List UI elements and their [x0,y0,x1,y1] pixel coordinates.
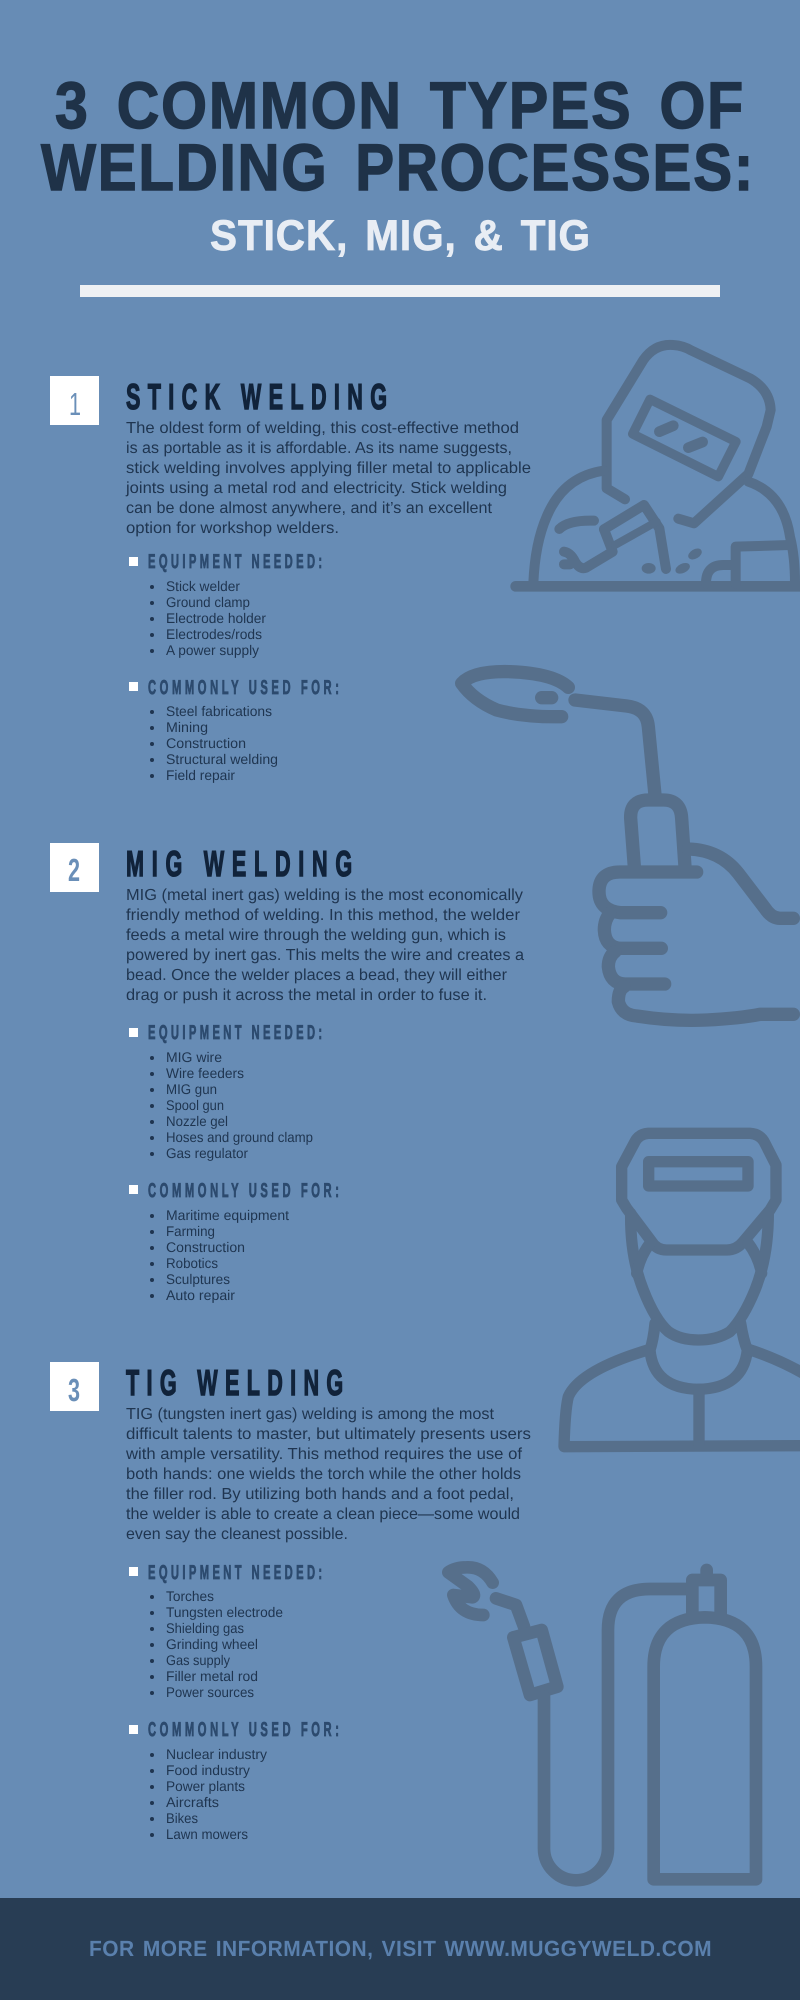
description: stick welding [125,420,531,537]
list: tig uses: Lawn mowers [166,1826,248,1842]
panel: mig welding [50,843,524,1303]
description: tig welding [125,1406,531,1543]
list: mig equipment: Wire feeders [166,1065,244,1081]
description: tig welding: with ample versatility. This method requires the use of [125,1446,523,1463]
description: stick welding: is as portable as it is affordable. As its name suggests, [126,440,512,457]
description: mig welding: friendly method of welding. In this method, the welder [126,907,521,924]
list: tig equipment: Filler metal rod [166,1668,258,1684]
description: mig welding: drag or push it across the metal in order to fuse it. [126,987,487,1004]
list: tig equipment: Power sources [166,1684,254,1700]
description: tig welding: both hands: one wields the torch while the other holds [126,1466,521,1483]
heading: stick welding: STICK WELDING [126,376,387,417]
list: stick equipment: Stick welder [166,578,240,594]
list: mig equipment: MIG wire [166,1049,222,1065]
heading: tig welding: TIG WELDING [126,1362,343,1403]
description: tig welding: even say the cleanest possible. [126,1526,348,1543]
title [41,68,755,204]
list: stick equipment: Electrode holder [166,610,266,626]
number badge 2 [50,843,99,892]
list: mig equipment: Nozzle gel [166,1113,228,1129]
description: tig welding: the filler rod. By utilizing both hands and a foot pedal, [126,1486,514,1503]
divider bar [80,285,720,297]
footer band [0,1898,800,2000]
list: mig uses [150,1207,289,1303]
list: stick uses: Construction [166,735,246,751]
number badge 1 [50,376,99,425]
list: tig equipment: Grinding wheel [166,1636,258,1652]
list: stick equipment: A power supply [166,642,259,658]
number badge 2: 2 [68,852,80,888]
description: mig welding: powered by inert gas. This melts the wire and creates a [126,947,524,964]
list: tig equipment: Tungsten electrode [166,1604,283,1620]
description: mig welding: feeds a metal wire through the welding gun, which is [126,927,506,944]
list: mig uses: Farming [166,1223,215,1239]
list: mig uses: Construction [166,1239,245,1255]
list: tig uses: Power plants [166,1778,245,1794]
list: tig uses [150,1746,267,1842]
list: stick uses [150,703,278,783]
description: mig welding [126,887,524,1004]
description: mig welding: MIG (metal inert gas) welding is the most economically [126,887,523,904]
number badge 3: 3 [68,1372,80,1408]
list: tig equipment: Torches [166,1588,214,1604]
subheading: commonly used for: COMMONLY USED FOR: [148,1719,339,1741]
description: mig welding: bead. Once the welder places a bead, they will either [126,967,508,984]
list: stick uses: Steel fabrications [166,703,272,719]
list: stick uses: Structural welding [166,751,278,767]
list: mig uses: Sculptures [166,1271,230,1287]
panel: stick welding [50,376,531,783]
list: mig equipment: Spool gun [166,1097,224,1113]
number badge 3 [50,1362,99,1411]
list: mig uses: Auto repair [166,1287,235,1303]
footer text: FOR MORE INFORMATION, VISIT WWW.MUGGYWELD.COM [89,1936,712,1961]
list: tig uses: Food industry [166,1762,250,1778]
description: stick welding: The oldest form of welding, this cost-effective method [126,420,519,437]
description: stick welding: option for workshop welders. [126,520,339,537]
icon: hand holding welding torch [462,672,793,1020]
list: stick equipment: Electrodes/rods [166,626,262,642]
list: stick equipment: Ground clamp [166,594,250,610]
subheading: equipment needed: EQUIPMENT NEEDED: [148,1022,322,1044]
description: tig welding: difficult talents to master, but ultimately presents users [126,1426,531,1443]
list: stick equipment [150,578,266,658]
description: stick welding: joints using a metal rod and electricity. Stick welding [125,480,507,497]
subtitle: STICK, MIG, & TIG [210,212,591,260]
subheading: equipment needed: EQUIPMENT NEEDED: [148,1562,322,1584]
number badge 1: 1 [69,386,81,422]
description: stick welding: stick welding involves applying filler metal to applicable [126,460,531,477]
subheading: commonly used for: COMMONLY USED FOR: [148,1180,339,1202]
subheading: equipment needed: EQUIPMENT NEEDED: [148,551,322,573]
list: mig uses: Robotics [166,1255,218,1271]
list: tig equipment: Gas supply [166,1652,230,1668]
icon: welder at work [516,345,800,586]
list: tig equipment: Shielding gas [166,1620,244,1636]
list: tig uses: Nuclear industry [166,1746,267,1762]
list: tig uses: Aircrafts [166,1794,219,1810]
icon: welder portrait with mask [564,1133,800,1447]
list: mig equipment: Hoses and ground clamp [166,1129,313,1145]
subheading: commonly used for: COMMONLY USED FOR: [148,677,339,699]
list: mig equipment: MIG gun [166,1081,217,1097]
list: mig equipment: Gas regulator [166,1145,248,1161]
list: mig uses: Maritime equipment [166,1207,289,1223]
list: stick uses: Field repair [166,767,235,783]
icon: gas cylinder with TIG torch [448,1567,756,1880]
list: mig equipment [150,1049,313,1161]
panel: tig welding [50,1362,531,1842]
description: stick welding: can be done almost anywhere, and it’s an excellent [126,500,493,517]
list: tig equipment [150,1588,283,1700]
description: tig welding: TIG (tungsten inert gas) welding is among the most [126,1406,495,1423]
list: tig uses: Bikes [166,1810,198,1826]
heading: mig welding: MIG WELDING [126,843,352,884]
list: stick uses: Mining [166,719,208,735]
description: tig welding: the welder is able to create a clean piece—some would [126,1506,520,1523]
